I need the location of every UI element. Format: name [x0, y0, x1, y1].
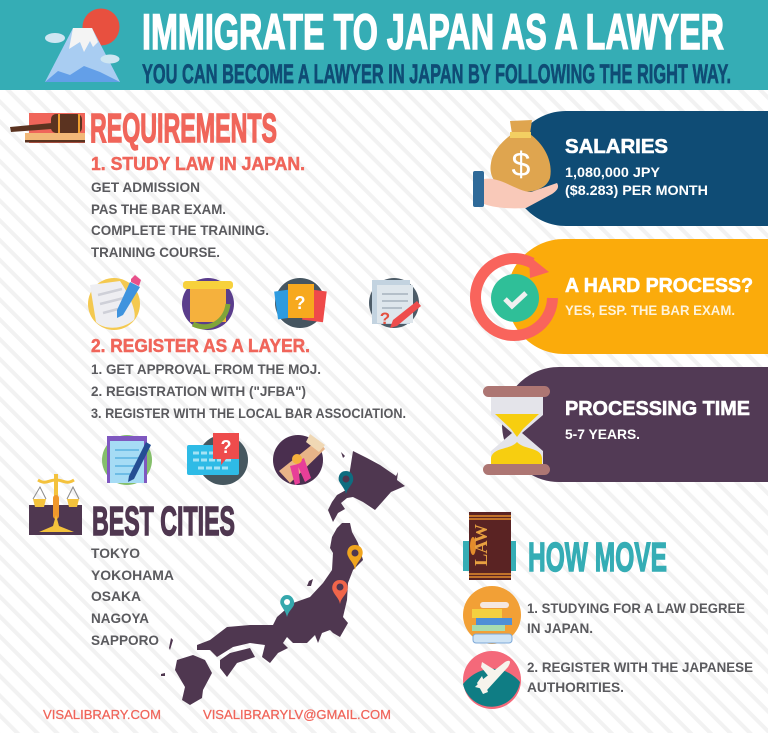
- footer links: [43, 707, 391, 722]
- icon: plane and globe: [463, 651, 521, 709]
- icon: documents and pencil: ?: [380, 309, 390, 328]
- header banner: [0, 0, 768, 90]
- panel: processing time: 5-7 YEARS.: [565, 426, 640, 442]
- footer links: VISALIBRARYLV@GMAIL.COM: [203, 707, 391, 722]
- icon: scales of justice: [29, 474, 82, 535]
- map: japan: [161, 451, 405, 705]
- city list: SAPPORO: [91, 632, 159, 648]
- text: step 1: 1. STUDYING FOR A LAW DEGREE: [527, 600, 745, 616]
- icon: notepad and pen: [102, 435, 152, 485]
- step 1 list: COMPLETE THE TRAINING.: [91, 222, 269, 238]
- icon: stack of books: [463, 586, 521, 644]
- city list: [91, 545, 174, 648]
- panel: salaries: ($8.283) PER MONTH: [565, 182, 708, 198]
- heading: requirements: REQUIREMENTS: [90, 105, 277, 151]
- step 1 list: [91, 179, 269, 260]
- pin: osaka area: [280, 595, 294, 617]
- panel: salaries: 1,080,000 JPY: [565, 164, 661, 180]
- step 1 heading: 1. STUDY LAW IN JAPAN.: [91, 154, 305, 174]
- icon: law book: LAW: [471, 524, 491, 566]
- city list: NAGOYA: [91, 610, 149, 626]
- icon: mount fuji and sun: [45, 8, 120, 82]
- icon: question cards: ?: [294, 293, 306, 313]
- panel: processing time: [483, 367, 768, 482]
- icon: hourglass: [483, 386, 550, 475]
- icon: law book: [463, 512, 516, 580]
- icon: documents and pencil: [369, 278, 421, 328]
- icon: paper and pencil: [88, 275, 141, 330]
- text: processing time: PROCESSING TIME: [565, 398, 750, 420]
- text: a hard process: A HARD PROCESS?: [565, 275, 753, 297]
- step 1 list: TRAINING COURSE.: [91, 244, 220, 260]
- icon: gavel on book: [10, 113, 85, 143]
- city list: YOKOHAMA: [91, 567, 174, 583]
- city list: TOKYO: [91, 545, 140, 561]
- heading: how move: HOW MOVE: [528, 534, 667, 580]
- footer links: VISALIBRARY.COM: [43, 707, 161, 722]
- panel: best cities: [29, 474, 235, 648]
- icon: certificate and ribbon: [273, 434, 325, 485]
- icon: keyboard with question bubble: ?: [220, 437, 232, 457]
- step 2 list: 3. REGISTER WITH THE LOCAL BAR ASSOCIATION.: [91, 405, 406, 421]
- panel: how move: AUTHORITIES.: [527, 679, 624, 695]
- icon: cycle arrow and check: [476, 256, 552, 336]
- icon: question cards: [274, 278, 327, 328]
- city list: OSAKA: [91, 588, 141, 604]
- pin: yokohama area: [347, 545, 363, 570]
- icon: money bag in hand: $: [512, 146, 531, 184]
- text: step 2: 2. REGISTER WITH THE JAPANESE: [527, 659, 753, 675]
- step 1 list: PAS THE BAR EXAM.: [91, 201, 226, 217]
- pin: tokyo area: [332, 580, 348, 604]
- icon: keyboard with question bubble: [187, 433, 248, 485]
- text: salaries: SALARIES: [565, 136, 668, 158]
- step 1 list: GET ADMISSION: [91, 179, 200, 195]
- panel: a hard process: [476, 239, 768, 354]
- step 2 list: [91, 361, 406, 421]
- panel: requirements: [10, 105, 421, 485]
- heading: best cities: BEST CITIES: [92, 498, 235, 544]
- step 2 heading: 2. REGISTER AS A LAYER.: [91, 336, 310, 356]
- panel: a hard process: YES, ESP. THE BAR EXAM.: [565, 302, 735, 318]
- step 2 list: 1. GET APPROVAL FROM THE MOJ.: [91, 361, 321, 377]
- panel: salaries: [473, 111, 768, 226]
- panel: how move: IN JAPAN.: [527, 620, 593, 636]
- panel: how move: [463, 512, 753, 709]
- pin: sapporo: [339, 471, 353, 494]
- step 2 list: 2. REGISTRATION WITH ("JFBA"): [91, 383, 306, 399]
- icon: scroll with laurel: [182, 278, 234, 330]
- icon: money bag in hand: [473, 120, 558, 208]
